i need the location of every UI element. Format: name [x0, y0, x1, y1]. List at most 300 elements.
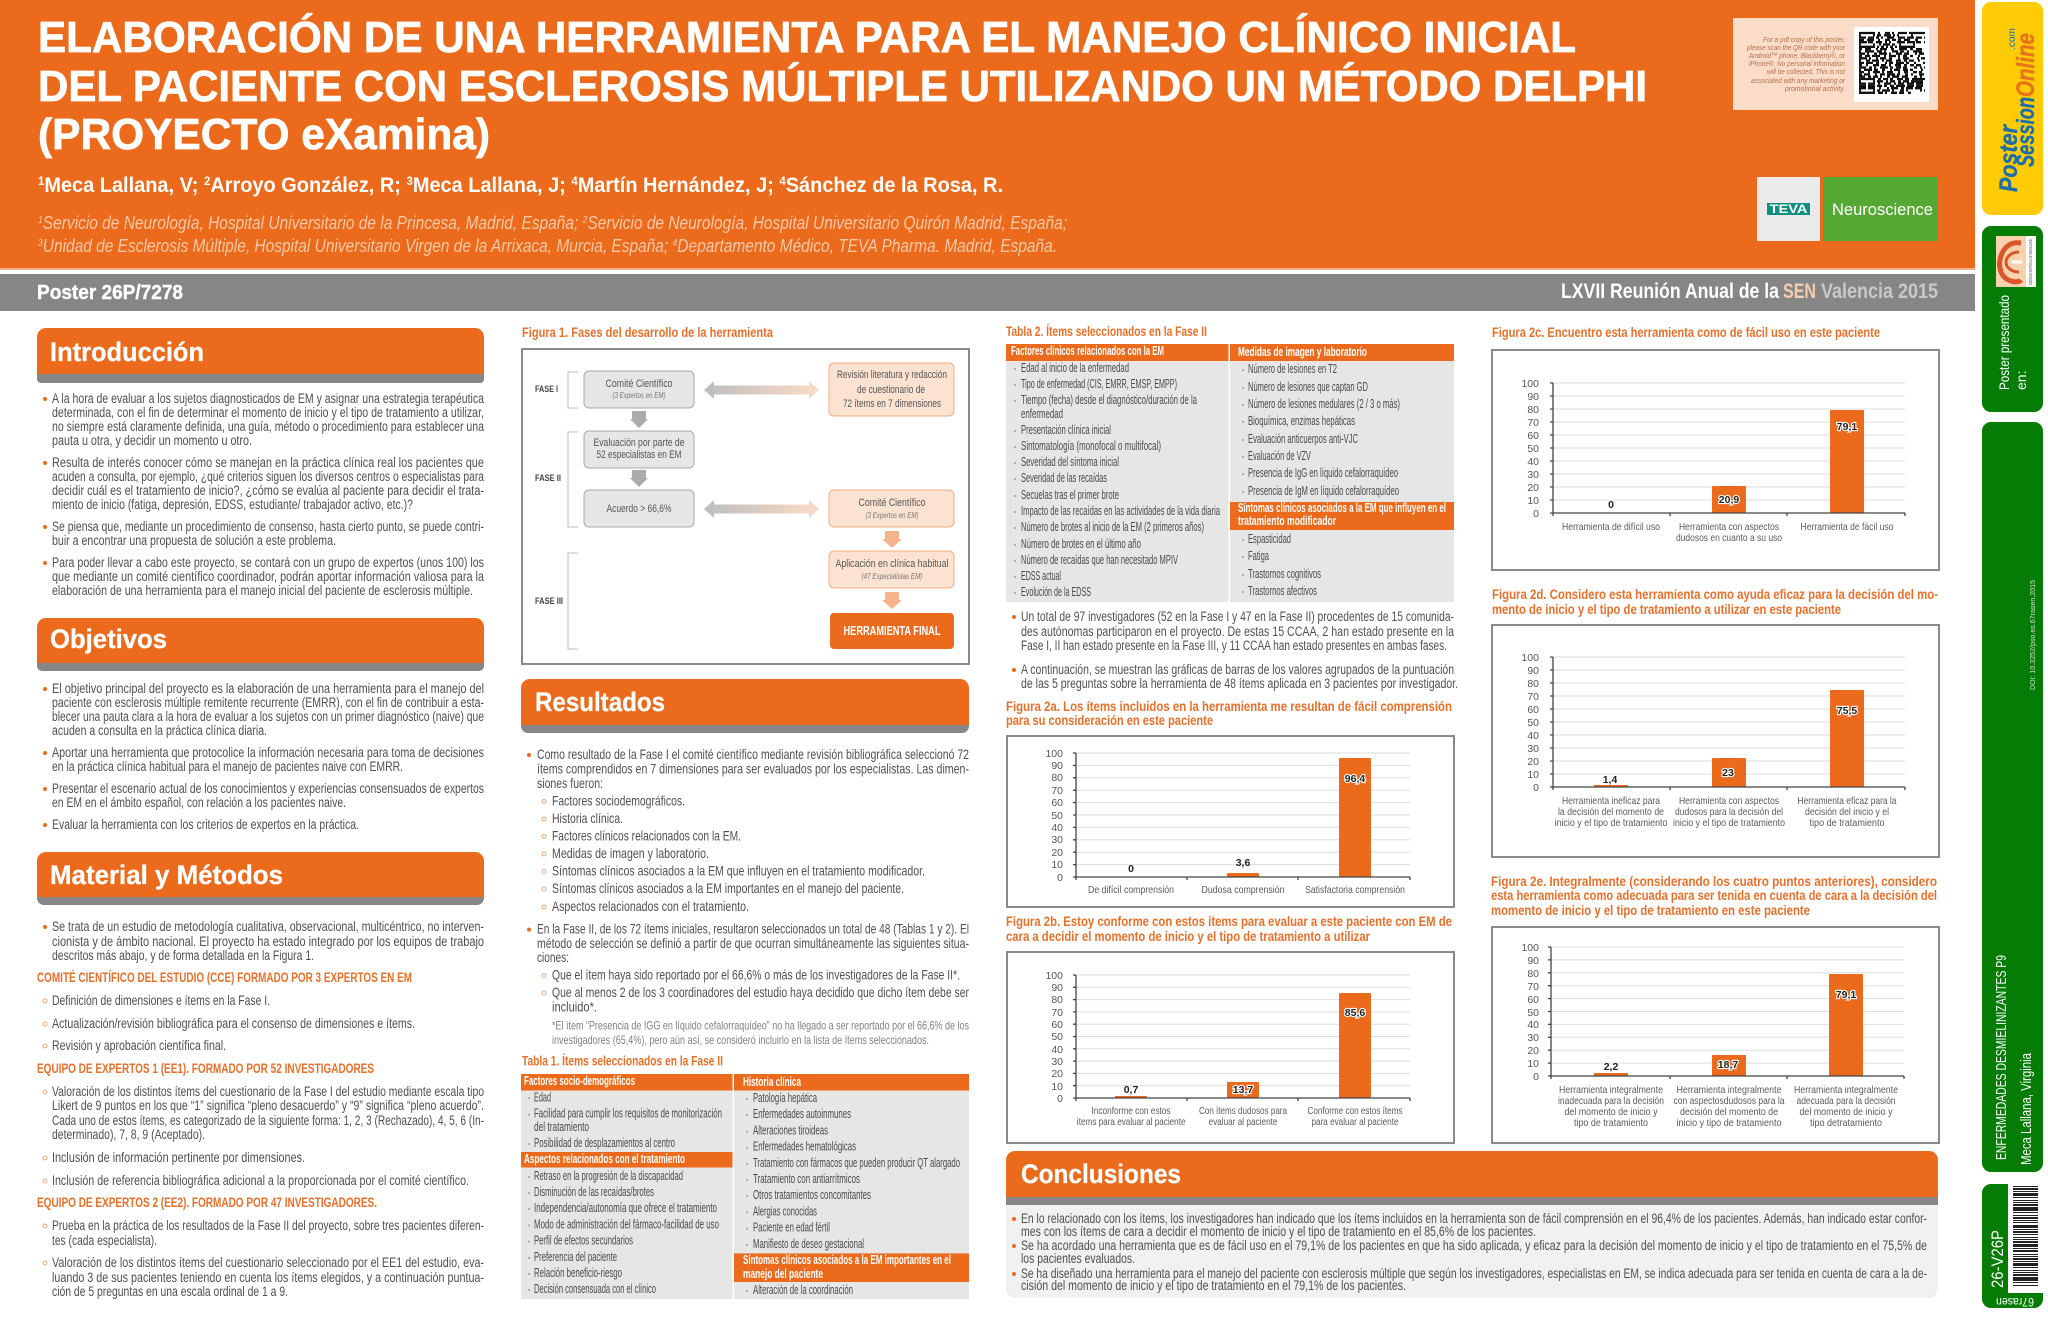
figure 2b heading — [1006, 914, 1452, 944]
authors: Meca Lallana, J; — [413, 174, 571, 197]
sidebar: poster details: ENFERMEDADES DESMIELINIZANTES P9 — [1993, 955, 2010, 1160]
text block: conclusiones: los pacientes evaluados. — [1021, 1251, 1135, 1266]
text block: fase I: Síntomas clínicos asociados a la EM importantes en el manejo del paciente. — [552, 880, 904, 896]
table 1 right column: Alergias conocidas — [753, 1204, 817, 1218]
table 2 left column: Edad al inicio de la enfermedad — [1021, 361, 1129, 375]
chart: figure 2e: 50 — [1527, 1007, 1539, 1019]
chart: figure 2a: 96,4 — [1345, 773, 1365, 785]
table 1 right column: Alteraciones tiroideas — [753, 1124, 828, 1138]
table 1 — [521, 1074, 969, 1299]
table 1 right column: Enfermedades hematológicas — [753, 1140, 856, 1154]
text block: objetivos: paciente con esclerosis múltiple remitente recurrente (EMRR), con el fin de contribuir a esta- — [52, 695, 484, 710]
chart: figure 2d: 20 — [1527, 756, 1539, 768]
poster info bar: LXVII Reunión Anual de la — [1561, 280, 1779, 303]
sidebar: poster details: Meca Lallana, Virginia — [2018, 1053, 2035, 1165]
figure 2a heading: para su consideración en este paciente — [1006, 713, 1213, 728]
box: revisión literatura: de cuestionario de — [857, 384, 925, 396]
figure 2c heading: Figura 2c. Encuentro esta herramienta como de fácil uso en este paciente — [1492, 325, 1880, 340]
table 1 left column: Independencia/autonomía que ofrece el tratamiento — [534, 1201, 717, 1215]
table 2 heading: Tabla 2. Ítems seleccionados en la Fase II — [1006, 324, 1207, 339]
text block: equipo de expertos 2 — [37, 1195, 484, 1299]
figure 2e heading: momento de inicio y el tipo de tratamiento en este paciente — [1491, 903, 1810, 918]
chart: figure 2e: tipo detratamiento — [1810, 1117, 1882, 1129]
chart: figure 2e: tipo de tratamiento — [1574, 1117, 1648, 1129]
chart: figure 2e: Herramienta integralmente — [1676, 1084, 1782, 1096]
chart: figure 2d: 75,5 — [1837, 705, 1857, 717]
chart: figure 2a: 100 — [1045, 748, 1063, 760]
chart: figure 2b: evaluar al paciente — [1208, 1116, 1278, 1128]
box: comité científico — [584, 371, 694, 408]
affiliations: 4 — [673, 238, 678, 249]
panel: introducción — [37, 328, 484, 598]
heading: introducción: Introducción — [50, 337, 204, 367]
text block: fase I — [527, 746, 969, 914]
heading: resultados — [521, 679, 969, 733]
text block: fase II: método de selección se definió a partir de que ocurran simultáneamente las siguientes situa- — [537, 935, 969, 951]
chart: figure 2d: inicio y el tipo de tratamiento — [1554, 817, 1668, 829]
chart: figure 2d: 0 — [1533, 782, 1539, 794]
figure 2d heading: Figura 2d. Considero esta herramienta como ayuda eficaz para la decisión del mo- — [1492, 587, 1938, 602]
chart: figure 2d: 50 — [1527, 717, 1539, 729]
text block: objetivos: acuden a consulta en la práctica clínica diaria. — [52, 723, 267, 738]
chart: figure 2d: 1,4 — [1603, 774, 1617, 786]
affiliations: 3 — [38, 238, 43, 249]
box: aplicación: (47 Especialistas EM) — [862, 572, 923, 581]
chart: figure 2c: 90 — [1527, 391, 1539, 403]
chart: figure 2e: 0 — [1533, 1071, 1539, 1083]
chart: figure 2c: 80 — [1527, 404, 1539, 416]
table 1 left column: Edad — [534, 1090, 551, 1104]
chart: figure 2c: Herramienta de fácil uso — [1800, 521, 1894, 533]
table 1 right column: Patología hepática — [753, 1091, 817, 1105]
text block: objetivos: Presentar el escenario actual de los conocimientos y experiencias consensuados de expertos — [52, 781, 484, 796]
table 1 right column: Paciente en edad fértil — [753, 1221, 830, 1235]
table 2 right column: Número de lesiones medulares (2 / 3 o más) — [1248, 397, 1400, 411]
poster info bar: SEN — [1783, 280, 1816, 303]
chart: figure 2a: 50 — [1051, 810, 1063, 822]
sidebar: poster details: DOI: 10.3252/pso.es.67rasen.2015 — [2030, 580, 2037, 690]
chart: figure 2b: 0,7 — [1124, 1084, 1138, 1096]
text block: metodología: descritos más abajo, y de forma detallada en la Figura 1. — [52, 948, 314, 963]
box: comité científico: (3 Expertos en EM) — [612, 391, 666, 400]
heading: material y métodos — [37, 852, 484, 905]
QR code panel: Android™ phone, Blackberry®, or — [1748, 51, 1845, 60]
text block: fase II: ciones: — [537, 949, 569, 965]
table 2 right column: Fatiga — [1248, 549, 1269, 563]
text block: comité científico: Definición de dimensiones e ítems en la Fase I. — [52, 993, 270, 1008]
chart: figure 2b: 10 — [1051, 1081, 1063, 1093]
chart: figure 2c: 79,1 — [1837, 421, 1857, 433]
chart: figure 2e: 30 — [1527, 1032, 1539, 1044]
chart: figure 2c: 100 — [1521, 378, 1539, 390]
table 2 right column: Evaluación de VZV — [1248, 449, 1311, 463]
heading: objetivos: Objetivos — [50, 624, 167, 654]
QR code panel — [1733, 18, 1938, 110]
table 2 right column — [1238, 345, 1446, 598]
box: comité científico orange — [829, 490, 954, 527]
phase labels and brackets: FASE II — [535, 473, 561, 484]
chart: figure 2e: inicio y tipo de tratamiento — [1676, 1117, 1782, 1129]
table 1 right column: Enfermedades autoinmunes — [753, 1107, 851, 1121]
text block: objetivos: Evaluar la herramienta con los criterios de expertos en la práctica. — [52, 817, 359, 832]
figure 2d heading — [1492, 587, 1938, 617]
table 2 right column: Número de lesiones que captan GD — [1248, 380, 1368, 394]
affiliations: Servicio de Neurología, Hospital Universitario Quirón Madrid, España; — [587, 213, 1067, 233]
text block: investigadores: des autónomas participaron en el proyecto. De estas 15 CCAA, 2 han estado presente en la — [1021, 624, 1454, 639]
text block: investigadores: de las 5 preguntas sobre la herramienta de 48 ítems aplicada en 3 pacientes por investigador. — [1021, 676, 1458, 691]
text block: equipo de expertos 2: Prueba en la práctica de los resultados de la Fase II del proyecto, sobre tres pacientes diferen- — [52, 1218, 484, 1233]
table 2 left column: Presentación clínica inicial — [1021, 423, 1111, 437]
QR code panel: For a pdf copy of this poster, — [1763, 35, 1845, 44]
heading: conclusiones: Conclusiones — [1021, 1159, 1181, 1189]
chart: figure 2e — [1492, 927, 1939, 1143]
chart: figure 2d: 100 — [1521, 652, 1539, 664]
figure 2e heading — [1491, 874, 1937, 918]
table 2 left column: Tiempo (fecha) desde el diagnóstico/duración de la — [1021, 393, 1197, 407]
sidebar: poster session online logo: Online — [2012, 33, 2040, 97]
table 1 left column: Perfil de efectos secundarios — [534, 1234, 633, 1248]
text block: introducción: determinada, con el fin de determinar el momento de inicio y el tipo de tratamiento a utilizar, — [52, 405, 484, 420]
TEVA Neuroscience logo: Neuroscience — [1832, 200, 1933, 219]
text block: introducción: Se piensa que, mediante un procedimiento de consenso, hasta cierto punto, se puede contri- — [52, 519, 484, 534]
text block: introducción: Para poder llevar a cabo este proyecto, se contará con un grupo de expertos (unos 100) los — [52, 555, 484, 570]
panel: material y métodos — [37, 852, 484, 1299]
phase labels and brackets: FASE I — [535, 384, 558, 395]
text block: introducción — [43, 391, 484, 598]
text block: objetivos: en la práctica clínica habitual para el manejo de pacientes naive con EMRR. — [52, 759, 403, 774]
chart: figure 2e: 2,2 — [1604, 1061, 1618, 1073]
chart: figure 2e: del momento de inicio y — [1564, 1106, 1658, 1118]
table 1 left column: Factores socio-demográficos — [524, 1074, 635, 1088]
text block: introducción: decidir cuál es el tratamiento de inicio?, ¿cómo se evalúa al paciente para decidir el trata- — [52, 483, 484, 498]
text block: investigadores: Fase I, II han estado presente en la Fase III, y 11 CCAA han estado presentes en ambas fases. — [1021, 638, 1447, 653]
table 2 left column: Número de recaídas que han necesitado MPIV — [1021, 553, 1178, 567]
chart: figure 2e: 100 — [1521, 942, 1539, 954]
text block: comité científico: Revisión y aprobación científica final. — [52, 1038, 226, 1053]
sidebar: presented at — [1982, 226, 2043, 412]
authors: 3 — [406, 174, 413, 188]
chart: figure 2b: 13,7 — [1233, 1084, 1253, 1096]
text block: introducción: no siempre está claramente definida, una guía, método o procedimiento para establecer una — [52, 419, 484, 434]
table 1 left column — [524, 1074, 722, 1296]
chart: figure 2e: 90 — [1527, 955, 1539, 967]
chart: figure 2a: 0 — [1128, 863, 1134, 875]
table 2 left column: EDSS actual — [1021, 569, 1061, 583]
chart: figure 2a: Satisfactoria comprensión — [1305, 884, 1405, 896]
icon: society logo — [1996, 236, 2036, 287]
icon: society logo: SOCIEDAD ESPAÑOLA DE NEUROLOGÍA — [2027, 239, 2033, 285]
table 2 right column: Presencia de IgG en líquido cefalorraquídeo — [1248, 466, 1398, 480]
chart: figure 2b: ítems para evaluar al paciente — [1076, 1116, 1186, 1128]
table 1 right column: Manifiesto de deseo gestacional — [753, 1237, 864, 1251]
QR code panel: will be collected. This is not — [1767, 67, 1846, 76]
chart: figure 2d: 23 — [1722, 767, 1734, 779]
table 2 right column: Trastornos cognitivos — [1248, 567, 1321, 581]
chart: figure 2c: 0 — [1533, 508, 1539, 520]
sidebar: poster session online logo: Session — [2012, 97, 2040, 167]
chart: figure 2d: Herramienta eficaz para la — [1798, 795, 1897, 807]
panel: resultados — [521, 679, 969, 1047]
box: revisión literatura: Revisión literatura y redacción — [837, 369, 947, 381]
chart: figure 2e: Herramienta integralmente — [1794, 1084, 1898, 1096]
chart: figure 2d: dudosos para la decisión del — [1675, 806, 1783, 818]
authors: Sánchez de la Rosa, R. — [786, 174, 1003, 197]
text block: equipo de expertos 1: Likert de 9 puntos en los que “1” significa “pleno desacuerdo” y “9” significa “pleno acuerdo”. — [52, 1098, 484, 1113]
table 1 right column: Síntomas clínicos asociados a la EM importantes en el — [743, 1253, 951, 1267]
affiliations — [38, 213, 1067, 256]
chart: figure 2b: 40 — [1051, 1044, 1063, 1056]
chart: figure 2a: De difícil comprensión — [1088, 884, 1174, 896]
authors: 4 — [779, 174, 786, 188]
table 1 right column: Otros tratamientos concomitantes — [753, 1188, 871, 1202]
text block: equipo de expertos 2: Valoración de los distintos ítems del cuestionario seleccionado por el EE1 del estudio, eva- — [52, 1255, 484, 1270]
chart: figure 2d: 90 — [1527, 665, 1539, 677]
chart: figure 2e: 20 — [1527, 1045, 1539, 1057]
QR code panel: please scan the QR code with your — [1746, 43, 1845, 52]
chart: figure 2e: 18,7 — [1718, 1059, 1738, 1071]
table 2 left column: Número de brotes al inicio de la EM (2 primeros años) — [1021, 520, 1204, 534]
text block: comité científico — [37, 970, 415, 1053]
sidebar: poster session online logo: Poster — [1995, 124, 2023, 192]
table 1 right column: Tratamiento con fármacos que pueden producir QT alargado — [753, 1156, 960, 1170]
chart: figure 2a: 30 — [1051, 834, 1063, 846]
affiliations: Unidad de Esclerosis Múltiple, Hospital Universitario Virgen de la Arrixaca, Murcia, España; — [43, 236, 673, 256]
text block: objetivos: en EM en el ámbito español, con relación a los pacientes naive. — [52, 795, 346, 810]
poster info bar: Poster 26P/7278 — [37, 282, 183, 304]
table 1 left column: Facilidad para cumplir los requisitos de monitorización — [534, 1107, 722, 1121]
chart: figure 2e: 40 — [1527, 1019, 1539, 1031]
chart: figure 2d: 60 — [1527, 704, 1539, 716]
text block: objetivos: El objetivo principal del proyecto es la elaboración de una herramienta para el manejo del — [52, 681, 484, 696]
figure 2a heading — [1006, 699, 1452, 728]
box: revisión literatura: 72 ítems en 7 dimensiones — [843, 398, 941, 410]
table 2 — [1006, 344, 1454, 602]
text block: fase I: Factores clínicos relacionados con la EM. — [552, 828, 741, 844]
chart: figure 2d: 10 — [1527, 769, 1539, 781]
figure 1: flow diagram — [522, 349, 969, 664]
text block: equipo de expertos 1: EQUIPO DE EXPERTOS 1 (EE1). FORMADO POR 52 INVESTIGADORES — [37, 1061, 374, 1076]
chart: figure 2a: 80 — [1051, 772, 1063, 784]
TEVA Neuroscience logo: TEVA — [1770, 202, 1808, 216]
text block: fase I: ítems comprendidos en 7 dimensiones para ser evaluados por los especialistas. Las dimen- — [537, 760, 969, 776]
affiliations: Departamento Médico, TEVA Pharma. Madrid, España. — [677, 236, 1057, 256]
box: revisión literatura — [829, 363, 954, 416]
text block: fase II: incluido*. — [552, 999, 597, 1015]
chart: figure 2d: Herramienta con aspectos — [1679, 795, 1779, 807]
table 2 left column: Severidad del síntoma inicial — [1021, 455, 1119, 469]
phase labels and brackets — [535, 372, 578, 649]
phase labels and brackets: FASE III — [535, 596, 563, 607]
authors: Martín Hernández, J; — [578, 174, 779, 197]
table 2 left column: Impacto de las recaídas en las actividades de la vida diaria — [1021, 504, 1220, 518]
table 2 left column: Número de brotes en el último año — [1021, 537, 1141, 551]
table 2 left column: Evolución de la EDSS — [1021, 585, 1091, 599]
authors: Arroyo González, R; — [210, 174, 406, 197]
chart: figure 2d: decisión del inicio y el — [1805, 806, 1889, 818]
chart: figure 2c: 30 — [1527, 469, 1539, 481]
text block: equipo de expertos 1 — [37, 1061, 484, 1188]
table 2 right column: Trastornos afectivos — [1248, 584, 1317, 598]
table 2 left column: Tipo de enfermedad (CIS, EMRR, EMSP, EMPP) — [1021, 377, 1177, 391]
chart: figure 2d: 80 — [1527, 678, 1539, 690]
sidebar: presented at: Poster presentado — [1996, 295, 2012, 390]
authors: Meca Lallana, V; — [44, 174, 204, 197]
table 1 right column: Historia clínica — [743, 1075, 802, 1089]
chart: figure 2b: 80 — [1051, 994, 1063, 1006]
figure 2e heading: esta herramienta como adecuada para ser tenida en cuenta de cara a la decisión del — [1491, 888, 1937, 903]
chart: figure 2e: con aspectosdudosos para la — [1674, 1095, 1785, 1107]
poster info bar — [0, 274, 1975, 311]
chart: figure 2b: 100 — [1045, 970, 1063, 982]
chart: figure 2e: 60 — [1527, 994, 1539, 1006]
chart: figure 2a: 40 — [1051, 822, 1063, 834]
chart: figure 2c: Herramienta de difícil uso — [1562, 521, 1660, 533]
chart: figure 2a: 3,6 — [1236, 857, 1250, 869]
text block: equipo de expertos 2: EQUIPO DE EXPERTOS 2 (EE2). FORMADO POR 47 INVESTIGADORES. — [37, 1195, 377, 1210]
table 2 right column: Bioquímica, enzimas hepáticas — [1248, 414, 1355, 428]
chart: figure 2b: 60 — [1051, 1019, 1063, 1031]
text block: equipo de expertos 1: Inclusión de información pertinente por dimensiones. — [52, 1150, 305, 1165]
title — [38, 12, 1647, 159]
table 1 right column — [743, 1075, 960, 1297]
table 2 left column: Secuelas tras el primer brote — [1021, 488, 1119, 502]
box: aplicación — [829, 551, 954, 588]
text block: introducción: acuden a consulta, por ejemplo, ¿qué criterios siguen los diversos centros o especialistas para — [52, 469, 484, 484]
affiliations: 2 — [582, 215, 588, 226]
chart: figure 2c: 0 — [1608, 499, 1614, 511]
box: comité científico orange: (3 Expertos en EM) — [866, 511, 919, 520]
box: aplicación: Aplicación en clínica habitual — [836, 558, 948, 570]
chart: figure 2c: 40 — [1527, 456, 1539, 468]
chart: figure 2a: 90 — [1051, 760, 1063, 772]
text block: introducción: A la hora de evaluar a los sujetos diagnosticados de EM y asignar una estrategia terapéutica — [52, 391, 484, 406]
text block: fase II — [527, 921, 969, 1047]
poster info bar: Valencia 2015 — [1821, 280, 1938, 303]
text block: fase II: En la Fase II, de los 72 ítems iniciales, resultaron seleccionados un total de 48 (Tablas 1 y 2). El — [537, 921, 969, 937]
panel: objetivos — [37, 618, 484, 832]
chart: figure 2e: 79,1 — [1836, 989, 1856, 1001]
chart: figure 2d — [1492, 625, 1939, 857]
chart: figure 2e: 70 — [1527, 981, 1539, 993]
box: comité científico orange: Comité Científico — [858, 497, 926, 509]
text block: fase I: Como resultado de la Fase I el comité científico mediante revisión bibliográfica seleccionó 72 — [537, 746, 969, 762]
figure 1 heading: Figura 1. Fases del desarrollo de la herramienta — [522, 325, 773, 340]
figure 2e heading: Figura 2e. Integralmente (considerando los cuatro puntos anteriores), considero — [1491, 874, 1937, 889]
text block: equipo de expertos 1: determinado), 7, 8, 9 (Aceptado). — [52, 1127, 205, 1142]
box: herramienta final — [830, 613, 954, 649]
table 1 left column: Modo de administración del fármaco-facilidad de uso — [534, 1217, 719, 1231]
chart: figure 2d: Herramienta ineficaz para — [1562, 795, 1660, 807]
QR code panel: associated with any marketing or — [1751, 76, 1845, 85]
chart: figure 2e: 10 — [1527, 1058, 1539, 1070]
table 1 right column: Alteración de la coordinación — [753, 1283, 853, 1297]
chart: figure 2a: Dudosa comprensión — [1202, 884, 1285, 896]
text block: introducción: que mediante un comité científico coordinador, podrán aportar información valiosa para la — [52, 569, 484, 584]
QR code panel: promotional activity. — [1784, 84, 1845, 93]
table 1 left column: Decisión consensuada con el clínico — [534, 1282, 656, 1296]
text block: fase II: *El ítem “Presencia de IGG en líquido cefalorraquídeo” no ha llegado a ser reportado por el 66,6% de los — [552, 1019, 969, 1033]
chart: figure 2c: 50 — [1527, 443, 1539, 455]
heading: material y métodos: Material y Métodos — [50, 860, 283, 890]
text block: comité científico: COMITÉ CIENTÍFICO DEL ESTUDIO (CCE) FORMADO POR 3 EXPERTOS EN EM — [37, 970, 412, 985]
chart: figure 2b — [1007, 952, 1454, 1143]
table 2 left column: Severidad de las recaídas — [1021, 471, 1107, 485]
figure 2a heading: Figura 2a. Los ítems incluidos en la herramienta me resultan de fácil comprensión — [1006, 699, 1452, 714]
text block: objetivos: Aportar una herramienta que protocolice la información necesaria para toma de decisiones — [52, 745, 484, 760]
text block: fase I: Medidas de imagen y laboratorio. — [552, 845, 709, 861]
chart: figure 2e: del momento de inicio y — [1800, 1106, 1893, 1118]
text block: investigadores — [1012, 609, 1458, 691]
authors: 1 — [38, 174, 45, 188]
text block: fase II: investigadores (65,4%), pero aún así, se consideró incluirlo en la lista de ítems seleccionados. — [552, 1033, 929, 1047]
chart: figure 2b: 50 — [1051, 1031, 1063, 1043]
text block: introducción: Resulta de interés conocer cómo se manejan en la práctica clínica real los pacientes que — [52, 455, 484, 470]
chart: figure 2b: 30 — [1051, 1056, 1063, 1068]
chart: figure 2e: decisión del momento de — [1680, 1106, 1778, 1118]
chart: figure 2b: 85,6 — [1345, 1007, 1365, 1019]
chart: figure 2a: 70 — [1051, 785, 1063, 797]
text block: fase I: Historia clínica. — [552, 810, 623, 826]
sidebar: barcode: 26-V26P — [1988, 1230, 2007, 1288]
title: (PROYECTO eXamina) — [38, 110, 490, 159]
text block: equipo de expertos 2: ción de 5 preguntas en una escala ordinal de 1 a 9. — [52, 1284, 288, 1299]
text block: objetivos — [43, 681, 484, 832]
box: herramienta final: HERRAMIENTA FINAL — [844, 623, 941, 638]
sidebar: poster details — [1982, 422, 2043, 1172]
chart: figure 2b: Con ítems dudosos para — [1199, 1105, 1287, 1117]
QR code panel: iPhone®. No personal information — [1749, 59, 1845, 68]
table 2 left column — [1011, 344, 1220, 599]
table 2 left column: Factores clínicos relacionados con la EM — [1011, 344, 1164, 358]
text block: introducción: elaboración de una herramienta para el manejo inicial del paciente de esclerosis múltiple. — [52, 583, 473, 598]
chart: figure 2b: Inconforme con estos — [1092, 1105, 1170, 1117]
table 1 left column: Preferencia del paciente — [534, 1250, 617, 1264]
chart: figure 2e: 80 — [1527, 968, 1539, 980]
text block: metodología: Se trata de un estudio de metodología cualitativa, observacional, multicéntrico, no interven- — [52, 919, 484, 934]
affiliations: Servicio de Neurología, Hospital Universitario de la Princesa, Madrid, España; — [43, 213, 583, 233]
heading: resultados: Resultados — [535, 687, 665, 717]
table 1 left column: Relación beneficio-riesgo — [534, 1266, 622, 1280]
chart: figure 2a: 0 — [1057, 872, 1063, 884]
title: ELABORACIÓN DE UNA HERRAMIENTA PARA EL MANEJO CLÍNICO INICIAL — [38, 12, 1576, 62]
chart: figure 2c: 60 — [1527, 430, 1539, 442]
table 2 left column: Sintomatología (monofocal o multifocal) — [1021, 439, 1161, 453]
authors: 2 — [204, 174, 211, 188]
chart: figure 2a: 20 — [1051, 847, 1063, 859]
chart: figure 2b: Conforme con estos ítems — [1308, 1105, 1402, 1117]
TEVA Neuroscience logo — [1757, 177, 1938, 241]
text block: objetivos: blecer una pauta clara a la hora de evaluar a los sujetos con un primer diagnóstico (naive) que — [52, 709, 484, 724]
box: evaluación: 52 especialistas en EM — [596, 449, 682, 461]
figure 2d heading: mento de inicio y el tipo de tratamiento a utilizar en este paciente — [1492, 602, 1841, 617]
chart: figure 2a — [1007, 736, 1454, 907]
chart: figure 2c: dudosos en cuanto a su uso — [1676, 532, 1782, 544]
box: evaluación: Evaluación por parte de — [594, 437, 684, 449]
table 1 heading: Tabla 1. Ítems seleccionados en la Fase II — [522, 1054, 723, 1069]
table 1 left column: Aspectos relacionados con el tratamiento — [524, 1152, 685, 1166]
chart: figure 2d: tipo de tratamiento — [1810, 817, 1885, 829]
box: acuerdo — [584, 490, 694, 527]
table 2 right column: tratamiento modificador — [1238, 514, 1336, 528]
text block: equipo de expertos 2: tes (cada especialista). — [52, 1233, 157, 1248]
authors: 4 — [571, 174, 578, 188]
chart: figure 2c: 20 — [1527, 482, 1539, 494]
table 2 right column: Síntomas clínicos asociados a la EM que influyen en el — [1238, 501, 1446, 515]
chart: figure 2c: Herramienta con aspectos — [1679, 521, 1779, 533]
text block: conclusiones: mes con los ítems de cara a decidir el momento de inicio y el tipo de tratamiento en el 85,6% de los pacientes. — [1021, 1224, 1536, 1239]
table 1 left column: del tratamiento — [534, 1120, 589, 1134]
chart: figure 2b: 90 — [1051, 982, 1063, 994]
